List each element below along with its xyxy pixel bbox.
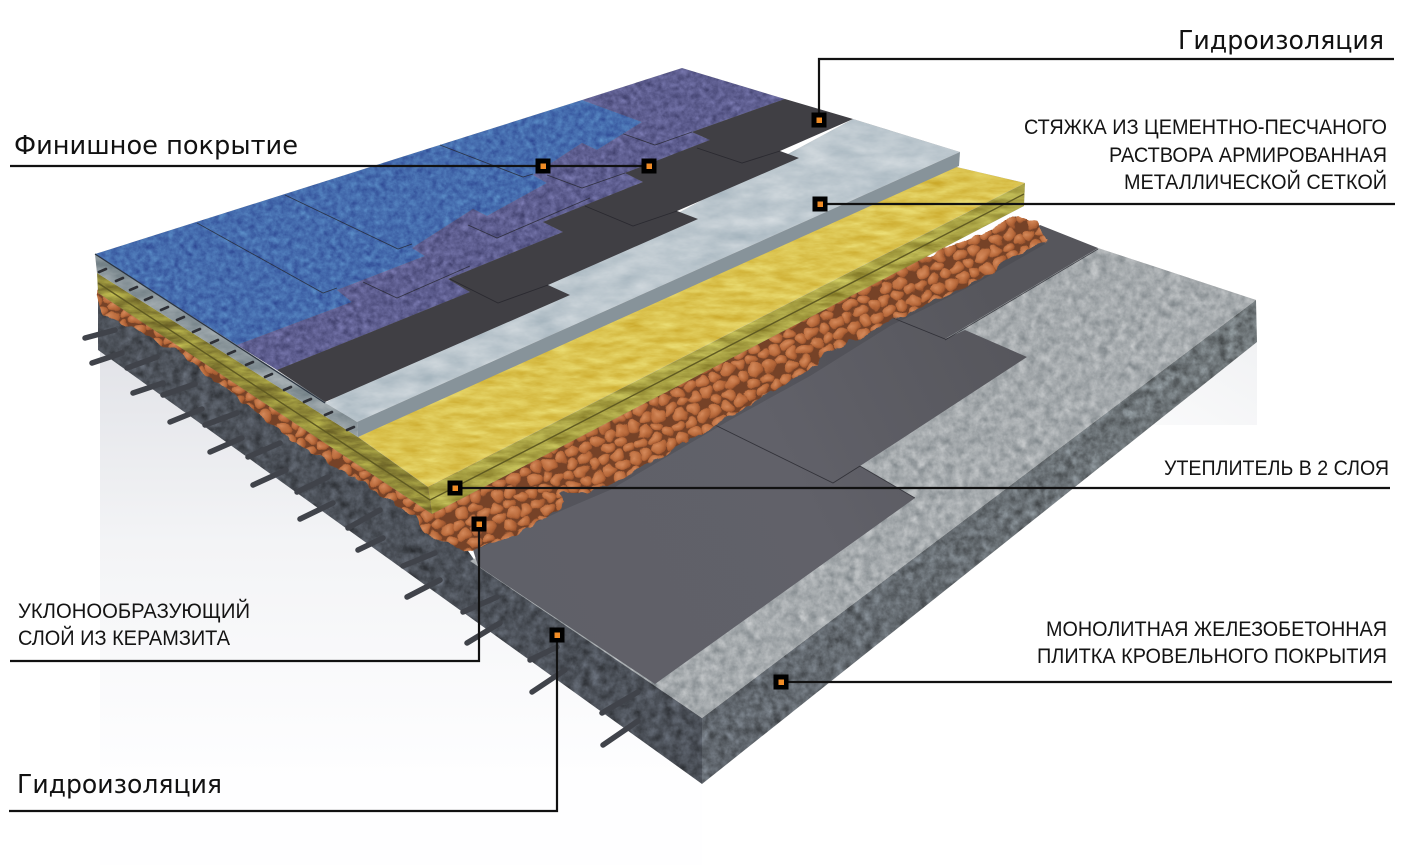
clay left band [96, 290, 442, 532]
label: clay slope layer: СЛОЙ ИЗ КЕРАМЗИТА [18, 626, 230, 650]
floor shadow [100, 342, 1257, 865]
panel: concrete slab [98, 248, 1257, 784]
label: monolithic slab: ПЛИТКА КРОВЕЛЬНОГО ПОКРЫТИЯ [1037, 645, 1387, 668]
label: waterproofing top [812, 26, 1394, 128]
clay shadow [460, 225, 1045, 548]
label: waterproofing top: Гидроизоляция [1178, 26, 1384, 56]
slab top surface [470, 248, 1256, 718]
screed top [325, 119, 960, 422]
label: monolithic slab: МОНОЛИТНАЯ ЖЕЛЕЗОБЕТОННАЯ [1046, 618, 1387, 641]
screed left side [95, 254, 358, 437]
label: screed: СТЯЖКА ИЗ ЦЕМЕНТНО-ПЕСЧАНОГО [1024, 116, 1387, 139]
label: monolithic slab [774, 618, 1392, 690]
insulation top [358, 165, 1025, 487]
label: insulation: УТЕПЛИТЕЛЬ В 2 СЛОЯ [1164, 457, 1389, 480]
insulation left side [97, 273, 432, 514]
label: clay slope layer: УКЛОНООБРАЗУЮЩИЙ [18, 599, 250, 623]
clay main mass [405, 216, 1048, 553]
label: waterproofing bottom: Гидроизоляция [17, 770, 222, 800]
insulation two layers [97, 165, 1025, 514]
label: finish covering [10, 131, 656, 174]
upper waterproofing dark layer [277, 99, 853, 402]
screed front side [357, 152, 960, 437]
label: screed: РАСТВОРА АРМИРОВАННАЯ [1109, 144, 1387, 167]
finish blue shingles [95, 100, 642, 403]
label: screed: МЕТАЛЛИЧЕСКОЙ СЕТКОЙ [1124, 170, 1387, 194]
purple shingle layer [237, 68, 785, 370]
mesh rod ends [99, 269, 354, 430]
label: insulation [448, 457, 1390, 496]
reinforcing rods [85, 330, 638, 745]
insulation front side [428, 183, 1025, 514]
slab left face [98, 293, 702, 784]
slab right face [702, 300, 1257, 784]
screed with mesh [95, 119, 960, 437]
expanded clay layer [96, 216, 1048, 553]
waterproofing sheet on slab [470, 225, 1098, 684]
label: waterproofing bottom [9, 628, 564, 811]
label: screed [812, 116, 1395, 212]
label: finish covering: Финишное покрытие [14, 131, 298, 161]
label: clay slope layer [10, 516, 486, 661]
